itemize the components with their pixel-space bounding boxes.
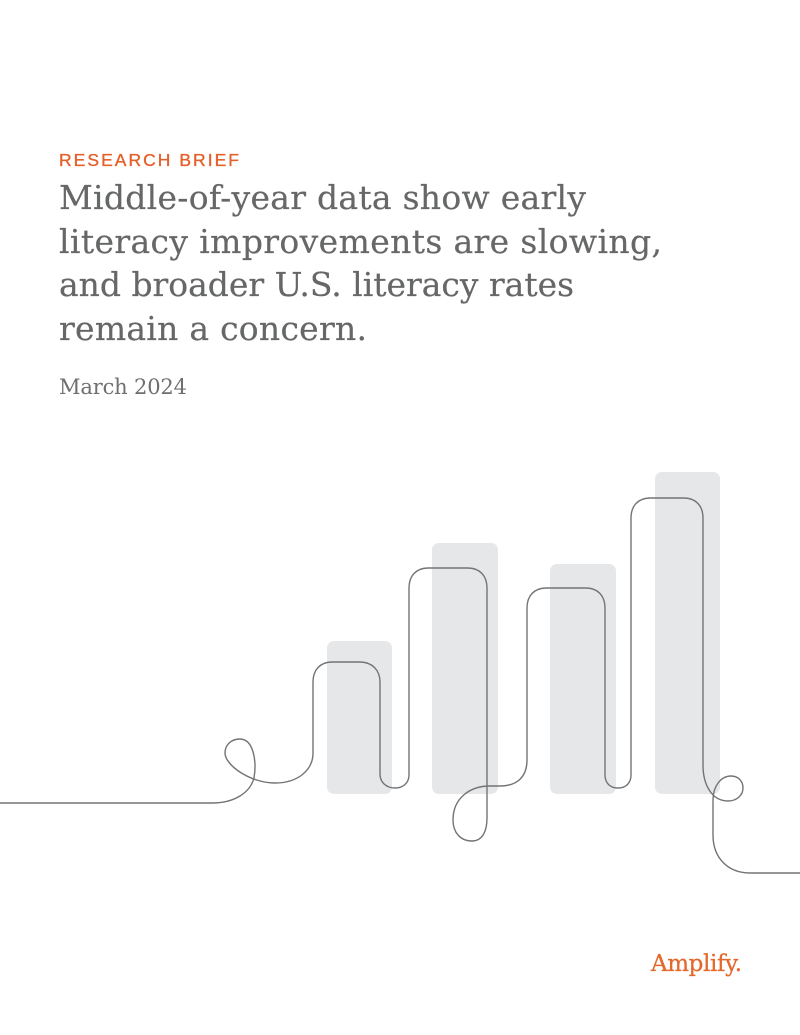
title: literacy improvements are slowing, bbox=[59, 222, 662, 261]
logo: Amplify: Amplify. bbox=[650, 951, 742, 977]
eyebrow: research brief: RESEARCH BRIEF bbox=[59, 150, 239, 170]
title: and broader U.S. literacy rates bbox=[59, 265, 574, 304]
bar chart: grey bars bbox=[327, 472, 720, 794]
title: Middle-of-year data show early bbox=[59, 178, 586, 217]
continuous line tracing the bars bbox=[0, 498, 800, 873]
date: March 2024 bbox=[59, 375, 187, 399]
title: remain a concern. bbox=[59, 309, 367, 348]
title bbox=[59, 178, 662, 348]
